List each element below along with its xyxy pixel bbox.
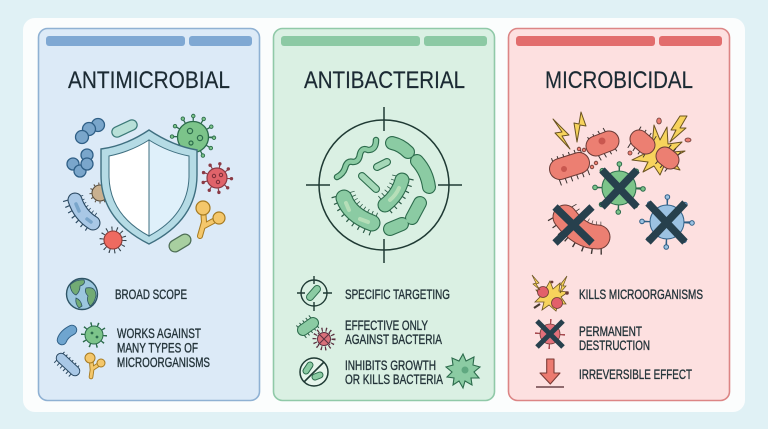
shield: [101, 130, 197, 244]
yellow Y-shaped microbe: [196, 201, 225, 236]
lightning bolt right: [670, 116, 687, 142]
panel: microbicidal: [508, 28, 730, 400]
crossed blue virus: [642, 197, 692, 247]
heading: microbicidal: MICROBICIDAL: [545, 67, 693, 94]
heading: antimicrobial: ANTIMICROBIAL: [68, 67, 230, 94]
crosshair: [306, 107, 462, 263]
header bars blue: [46, 36, 252, 46]
spiky bacterium right: [382, 177, 403, 207]
header bars green: [281, 36, 487, 46]
heading: antibacterial: ANTIBACTERIAL: [304, 67, 465, 94]
lightning bolts left: [553, 112, 586, 149]
label: works against many types of microorganisms: [117, 326, 210, 370]
label: works against many types of microorganisms: MICROORGANISMS: [117, 355, 210, 370]
capsule bacterium: [117, 125, 132, 132]
icon: many microorganisms: [59, 324, 105, 377]
cocci cluster: [67, 149, 93, 177]
label: works against many types of microorganisms: MANY TYPES OF: [117, 340, 198, 356]
header bars red: [516, 36, 722, 46]
green bean: [175, 240, 185, 246]
label: effective only against bacteria: EFFECTIVE ONLY: [345, 318, 428, 333]
label: effective only against bacteria: AGAINST BACTERIA: [345, 332, 442, 347]
rod bacteria ring: [390, 143, 429, 229]
icon: crossed microbe: [537, 321, 563, 347]
icon: globe: [66, 278, 98, 310]
tan microbe behind shield: [91, 184, 109, 202]
broken bacterium upper: [594, 138, 611, 149]
spiky bacterium left: [343, 194, 376, 225]
label: kills microorganisms: KILLS MICROORGANISMS: [579, 287, 703, 302]
exploding bacteria right: [634, 137, 674, 163]
small rods: [362, 162, 387, 189]
icon: down arrow: [536, 359, 564, 387]
label: inhibits growth or kills bacteria: OR KILLS BACTERIA: [345, 372, 443, 387]
green virus: [172, 116, 214, 158]
label: inhibits growth or kills bacteria: INHIBITS GROWTH: [345, 358, 436, 373]
label: inhibits growth or kills bacteria: [345, 358, 443, 387]
wavy spirillum: [337, 140, 376, 177]
crossed red bacterium: [555, 207, 604, 243]
label: broad scope: BROAD SCOPE: [115, 287, 187, 302]
icon: target: [297, 276, 332, 311]
illustration: shield surrounded by microbes: [67, 116, 232, 251]
label: works against many types of microorganisms: WORKS AGAINST: [117, 326, 201, 341]
label: irreversible effect: IRREVERSIBLE EFFECT: [579, 367, 692, 382]
broken bacterium lower: [556, 161, 586, 172]
crossed green virus: [595, 164, 643, 212]
icon: prohibited bacteria: [300, 358, 328, 386]
explosion star: [632, 125, 685, 175]
label: specific targeting: SPECIFIC TARGETING: [345, 287, 450, 302]
panel: antibacterial: [274, 28, 494, 400]
illustration: target with bacteria: [306, 107, 462, 263]
label: permanent destruction: DESTRUCTION: [579, 338, 650, 353]
icon: bacterium and crossed virus: [301, 320, 334, 348]
debris: [577, 118, 691, 169]
label: effective only against bacteria: [345, 318, 442, 347]
red virus: [202, 164, 232, 192]
cocci chain: [76, 118, 104, 144]
icon: burst bacterium: [446, 354, 480, 388]
illustration: destroyed microbes: [553, 112, 692, 247]
icon: kills microorganisms burst: [532, 275, 569, 311]
label: permanent destruction: PERMANENT: [579, 324, 642, 339]
panel: antimicrobial: [38, 28, 260, 400]
small red coccus: [102, 229, 124, 251]
label: permanent destruction: [579, 324, 650, 353]
spiky blue rod: [73, 198, 95, 224]
